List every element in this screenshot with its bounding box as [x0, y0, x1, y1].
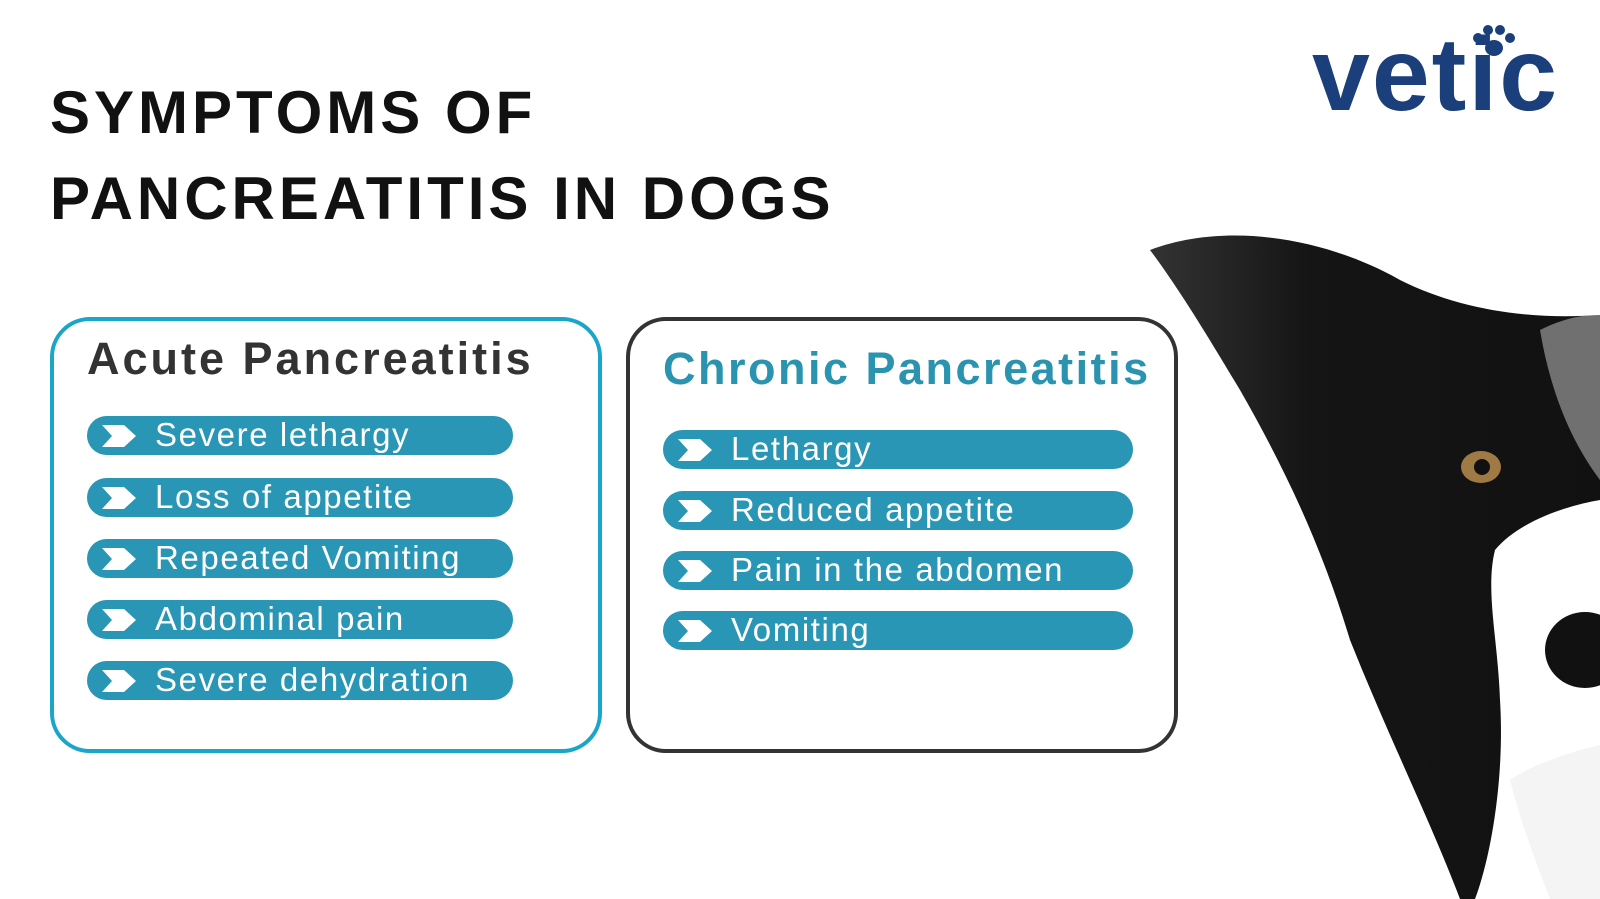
title: PANCREATITIS IN DOGS [50, 165, 834, 232]
pill items acute: Repeated Vomiting [155, 539, 461, 576]
pill items acute: Abdominal pain [155, 600, 405, 637]
pill items chronic [663, 430, 1133, 650]
panel: chronic [626, 317, 1178, 753]
dog image [1150, 236, 1600, 899]
title: SYMPTOMS OF [50, 79, 536, 146]
pill items acute: Severe dehydration [155, 661, 470, 698]
logo: vetic: vetic [1312, 17, 1559, 133]
pill items chronic: Lethargy [731, 430, 872, 467]
heading: chronic: Chronic Pancreatitis [663, 343, 1151, 394]
icon: paw [1473, 25, 1515, 56]
panel: acute [50, 317, 602, 753]
title [50, 79, 834, 232]
heading: acute: Acute Pancreatitis [87, 333, 534, 384]
pill items chronic: Vomiting [731, 611, 870, 648]
pill items chronic: Reduced appetite [731, 491, 1015, 528]
pill items chronic: Pain in the abdomen [731, 551, 1064, 588]
pill items acute [87, 416, 513, 700]
pill items acute: Loss of appetite [155, 478, 414, 515]
pill items acute: Severe lethargy [155, 416, 410, 453]
